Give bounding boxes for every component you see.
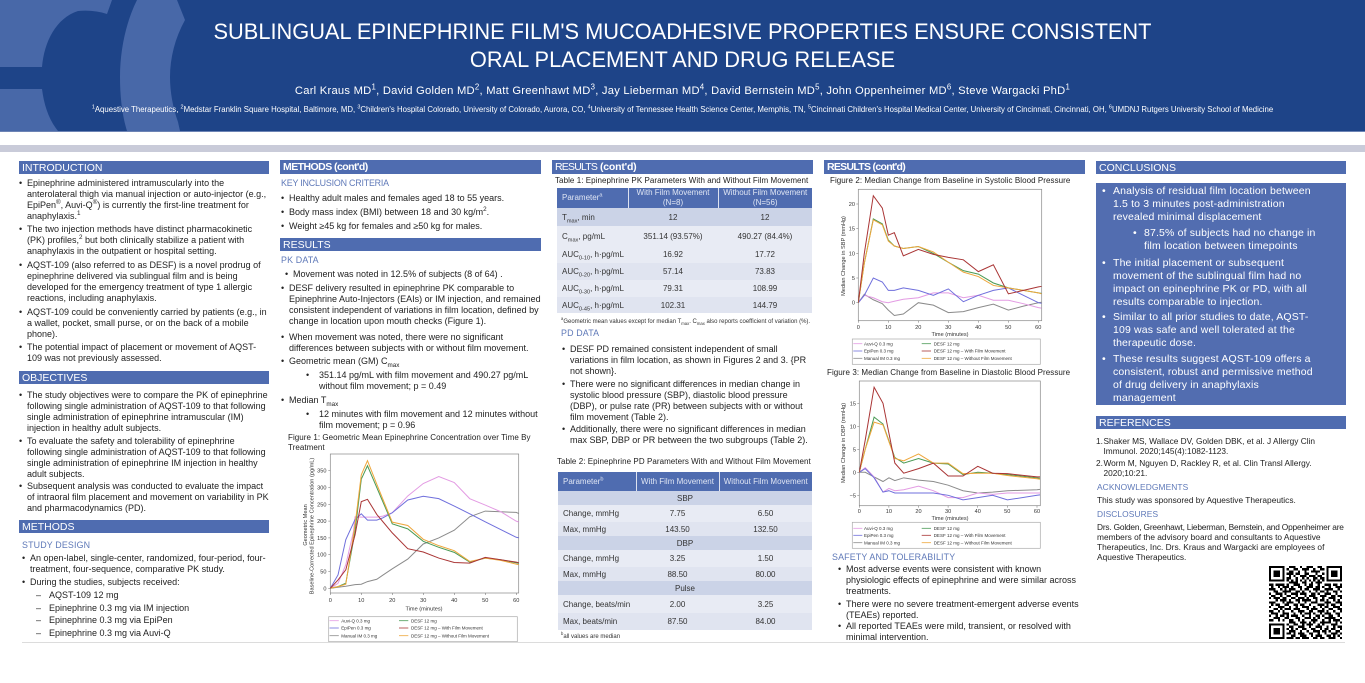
study design text: An open-label, single-center, randomized, four-period, four- [30,553,266,563]
figure 2: systolic blood pressure line chart: Time (minutes) [931,332,969,338]
table 2: PD parameters: Max, mmHg [563,570,606,578]
references list: 2. [1096,458,1103,468]
table 1: PK parameters: 108.99 [753,284,777,293]
table 1: PK parameters: 17.72 [755,250,775,259]
references list: Shaker MS, Wallace DV, Golden DBK, et al. J Allergy Clin [1104,436,1315,446]
conclusions box: These results suggest AQST-109 offers a [1113,353,1311,365]
figure 3: diastolic blood pressure line chart: DESF 12 mg – Without Film Movement [934,540,1012,545]
heading: methods continued: METHODS (cont'd) [283,161,368,173]
heading: conclusions: CONCLUSIONS [1099,162,1176,174]
objectives text: following single administration of AQST-109 to that following [27,447,266,457]
figure 3: diastolic blood pressure line chart: DESF 12 mg – With Film Movement [934,533,1006,538]
PK data text: differences between subjects with or without film movement. [289,343,528,353]
figure 2: systolic blood pressure line chart: 0 [852,301,855,307]
acknowledgments text: This study was sponsored by Aquestive Therapeutics. [1097,495,1296,505]
heading: objectives: OBJECTIVES [22,372,87,384]
conclusions box: 1.5 to 3 minutes post-administration [1113,198,1285,210]
PD data text: DESF PD remained consistent independent of small [570,344,778,354]
column 1: introduction, objectives, methods [19,161,269,638]
table 1: PK parameters: 57.14 [663,267,683,276]
conclusions box: • [1102,185,1106,197]
conclusions box: therapeutic dose. [1113,337,1196,349]
table 2: PD parameters: 143.50 [665,524,690,534]
disclosures text: Therapeutics, Inc. Drs. Kraus and Wargacki are employees of [1097,542,1324,552]
study design text: Epinephrine 0.3 mg via IM injection [49,603,189,613]
figure 1: geometric mean concentration line chart: 0 [329,598,332,604]
figure 1: geometric mean concentration line chart: 50 [482,598,488,604]
figure 3: diastolic blood pressure line chart: 0 [853,470,856,476]
introduction text: (PK) profiles,2 but both clinically stabilize a patient with [27,234,244,245]
introduction text: anaphylaxis.1 [27,210,81,221]
figure 2: systolic blood pressure line chart: EpiPen 0.3 mg [864,349,894,354]
introduction text: phone). [27,329,58,339]
table 1: PK parameters: Without Film Movement [723,188,807,197]
heading: results: RESULTS [283,239,331,251]
safety text: treatments. [846,586,891,596]
table 2: PD parameters: Change, beats/min [563,600,630,608]
figure 3: diastolic blood pressure line chart: Median Change in DBP (mmHg) [841,403,847,483]
PK data text: DESF delivery resulted in epinephrine PK comparable to [289,283,514,293]
conclusions box [1096,183,1346,405]
conclusions box: • [1102,257,1106,269]
PK data text: Epinephrine Auto-Injectors (EAIs) or IM injection, and remained [289,294,541,304]
figure 2: systolic blood pressure line chart: 20 [915,325,921,331]
figure 1: geometric mean concentration line chart: EpiPen 0.3 mg [341,626,371,631]
figure 3: diastolic blood pressure line chart: −5 [850,493,856,499]
objectives text: The study objectives were to compare the PK of epinephrine [27,390,268,400]
figure 3: diastolic blood pressure line chart: 15 [850,401,856,407]
heading: methods: METHODS [22,521,74,533]
figure 2: systolic blood pressure line chart: 15 [849,227,855,233]
references list: 2020;10:21. [1104,468,1147,478]
conclusions box: of drug delivery in anaphylaxis [1113,379,1259,391]
figure 2: systolic blood pressure line chart: 50 [1005,325,1011,331]
safety text: (TEAEs) reported. [846,610,919,620]
table 1: PK parameters: 12 [761,212,769,222]
figure 2: systolic blood pressure line chart: DESF 12 mg [934,341,960,346]
table 2: PD parameters: 1.50 [758,554,773,563]
conclusions box: 109 was safe and well tolerated at the [1113,324,1295,336]
introduction text: EpiPen®, Auvi-Q®) is currently the first-line treatment for [27,199,249,210]
safety text: Most adverse events were consistent with known [846,564,1041,574]
introduction text [19,178,267,363]
PD data text: not shown}. [570,366,617,376]
study design text: treatment, four-sequence, comparative PK study. [30,564,225,574]
study design text: Epinephrine 0.3 mg via EpiPen [49,615,173,625]
safety text: physiologic effects of epinephrine and were similar across [846,575,1076,585]
table 1: PK parameters: 73.83 [755,267,775,276]
heading: introduction: INTRODUCTION [22,162,102,174]
table 1: PK parameters: Parametera [562,192,602,202]
figure 1: geometric mean concentration line chart: 350 [317,469,326,475]
figure 2: systolic blood pressure line chart: 30 [945,325,951,331]
conclusions box: • [1133,227,1137,239]
conclusions box: film location between timepoints [1144,240,1298,252]
subheading: key inclusion criteria: KEY INCLUSION CRITERIA [281,178,389,188]
introduction text: anterolateral thigh via manual injection or auto-injector (e.g., [27,189,266,199]
table 1: PK parameters: AUC0-20, h·pg/mL [562,267,624,279]
figure 3: diastolic blood pressure line chart: Time (minutes) [931,516,969,522]
figure 1 caption [288,433,531,452]
table 1: PK parameters: 12 [669,212,677,222]
PK data text: Geometric mean (GM) Cmax [289,356,399,369]
figure 3: diastolic blood pressure line chart: 40 [975,509,981,515]
PD data text: systolic blood pressure (SBP), diastolic blood pressure [570,390,788,400]
column 2: methods continued, results, figure 1 [280,160,541,642]
conclusions box: consistent, robust and permissive method [1113,366,1313,378]
figure 2: systolic blood pressure line chart: 5 [852,276,855,282]
heading: methods [19,520,269,533]
figure 3: diastolic blood pressure line chart [841,380,1041,549]
table 2: PD parameters: With Film Movement [641,476,714,486]
PK data text: without film movement; p = 0.49 [319,381,446,391]
PK data text: film movement; p = 0.96 [319,420,415,430]
table 1: PK parameters: AUC0-30, h·pg/mL [562,284,624,296]
table 2: PD parameters: DBP [677,538,693,548]
figure 3: diastolic blood pressure line chart: 20 [915,509,922,515]
objectives text: of intraoral film placement and movement on variability in PK [27,492,269,502]
table 1: PK parameters: (N=8) [663,198,683,207]
heading: results continued [824,160,1085,174]
objectives text: To evaluate the safety and tolerability of epinephrine [27,436,235,446]
figure 3: diastolic blood pressure line chart: 10 [850,424,856,430]
PK data text: 12 minutes with film movement and 12 minutes without [319,409,538,419]
table 2: PD parameters [558,472,812,630]
figure 2: systolic blood pressure line chart: DESF 12 mg – Without Film Movement [934,356,1012,361]
heading: objectives [19,371,269,384]
figure 1: geometric mean concentration line chart: DESF 12 mg [411,618,437,623]
icon: QR code [1269,566,1342,639]
PK data text: consistent independent of variations in film location, defined by [289,305,539,315]
figure 2: systolic blood pressure line chart: Manual IM 0.3 mg [864,356,901,361]
subheading: study design: STUDY DESIGN [22,540,90,550]
objectives text: Subsequent analysis was conducted to evaluate the impact [27,481,263,491]
column 5: conclusions, references, disclosures [1096,161,1346,639]
heading: results [280,238,541,251]
heading: references: REFERENCES [1099,417,1171,429]
table 2: PD parameters: 80.00 [755,570,776,578]
introduction text: epinephrine delivered via sublingual film and is being [27,271,238,281]
references list: 1. [1096,436,1103,446]
table 2 footnote: b all values are median [561,631,620,640]
introduction text: The potential impact of placement or movement of AQST- [27,342,256,352]
objectives text: adult subjects. [27,469,85,479]
table 2 caption: Table 2: Epinephrine PD Parameters With and Without Film Movement [557,457,811,466]
conclusions box: movement of the sublingual film had no [1113,270,1301,282]
conclusions box: • [1102,353,1106,365]
figure 3: diastolic blood pressure line chart: 60 [1034,509,1040,515]
table 1: PK parameters: AUC0-45, h·pg/mL [562,300,624,312]
table 1 footnote: a Geometric mean values except for median Tmax. Cmax also reports coefficient of variation (%). [561,316,810,326]
heading: methods continued [280,160,541,174]
table 1: PK parameters [557,188,812,313]
figure 1: geometric mean concentration line chart: 100 [317,553,326,559]
PK data text: change in location upon mouth checks (Figure 1). [289,316,486,326]
safety text: minimal intervention. [846,632,929,642]
figure 2: systolic blood pressure line chart: 60 [1035,325,1041,331]
table 1: PK parameters: 144.79 [753,300,777,310]
introduction text: AQST-109 (also referred to as DESF) is a novel prodrug of [27,260,261,270]
heading: results continued [552,160,813,174]
header decorative logo shape [0,0,185,131]
figure 2: systolic blood pressure line chart [841,188,1042,365]
figure 3: diastolic blood pressure line chart: Auvi-Q 0.3 mg [864,526,893,531]
conclusions box: • [1102,311,1106,323]
figure 1: geometric mean concentration line chart: 250 [317,502,326,508]
table 1: PK parameters: 351.14 (93.57%) [643,232,703,240]
references list: Immunol. 2020;145(4):1082-1123. [1104,446,1228,456]
objectives text: and pharmacodynamics (PD). [27,503,146,513]
inclusion criteria list: Body mass index (BMI) between 18 and 30 kg/m2. [289,206,489,217]
figure 2: systolic blood pressure line chart: 10 [849,251,855,257]
conclusions box: revealed minimal displacement [1113,211,1262,223]
PD data text: max SBP, DBP or PR between the two subgroups (Table 2). [570,435,808,445]
table 1: PK parameters: 490.27 (84.4%) [738,232,792,240]
PD data text: film movement (Table 2). [570,412,669,422]
heading: conclusions [1096,161,1346,174]
objectives text: single administration of epinephrine IM injection in healthy [27,458,258,468]
figure 2: systolic blood pressure line chart: Median Change in SBP (mmHg) [841,216,847,296]
objectives text: injection in healthy adult subjects. [27,423,161,433]
objectives text: following single administration of AQST-109 to that following [27,401,266,411]
inclusion criteria list: Weight ≥45 kg for females and ≥50 kg for males. [289,221,482,231]
figure 2: systolic blood pressure line chart: 40 [975,325,981,331]
figure 1: geometric mean concentration line chart: 50 [320,570,326,576]
affiliations: 1Aquestive Therapeutics, 2Medstar Franklin Square Hospital, Baltimore, MD, 3Children's Hospital Colorado, University of Colorado, Aurora, CO, 4University of Tennessee Health Science Center, Memphis, TN, 5Cincinnati Children's Hospital Medical Center, University of Cincinnati, Cincinnati, OH, 6UMDNJ Rutgers University School of Medicine [92,104,1273,114]
figure 1: geometric mean concentration line chart: 200 [317,519,326,525]
figure 1: geometric mean concentration line chart: 60 [513,598,519,604]
figure 1: geometric mean concentration line chart: DESF 12 mg – Without Film Movement [411,633,490,638]
table 2: PD parameters: SBP [677,494,693,502]
study design text: Epinephrine 0.3 mg via Auvi-Q [49,628,171,638]
subheading: acknowledgments: ACKNOWLEDGMENTS [1097,482,1188,492]
table 1 caption: Table 1: Epinephrine PK Parameters With and Without Film Movement [555,176,808,185]
table 2: PD parameters: Without Film Movement [724,476,808,486]
introduction text: AQST-109 could be conveniently carried by patients (e.g., in [27,307,267,317]
safety text [838,564,1079,642]
table 2: PD parameters: Max, beats/min [563,617,617,626]
introduction text: The two injection methods have distinct pharmacokinetic [27,224,252,234]
PD data text: variations in film location, as shown in Figures 2 and 3. {PR [570,355,806,365]
figure 1 caption: Treatment [288,443,325,452]
table 2: PD parameters: Pulse [675,584,695,592]
subheading: safety and tolerability: SAFETY AND TOLERABILITY [832,552,955,562]
figure 2 caption: Figure 2: Median Change from Baseline in Systolic Blood Pressure [830,176,1070,185]
table 1: PK parameters: AUC0-10, h·pg/mL [562,250,624,262]
figure 3 caption: Figure 3: Median Change from Baseline in Diastolic Blood Pressure [827,368,1070,377]
heading: references [1096,416,1346,429]
authors: Carl Kraus MD1, David Golden MD2, Matt Greenhawt MD3, Jay Lieberman MD4, David Bernstein MD5, John Oppenheimer MD6, Steve Wargacki PhD1 [295,82,1070,97]
figure 3: diastolic blood pressure line chart: EpiPen 0.3 mg [864,533,894,538]
conclusions box: impact on epinephrine PK or PD, with all [1113,283,1307,295]
table 2: PD parameters: 132.50 [753,524,778,534]
table 1: PK parameters: Cmax, pg/mL [562,232,605,243]
table 2: PD parameters: 7.75 [670,509,685,518]
figure 1: geometric mean concentration line chart: 300 [317,486,326,492]
figure 1: geometric mean concentration line chart: Baseline-Corrected Epinephrine Concentration (pg/mL) [310,458,316,594]
title [214,19,1151,72]
references list: Worm M, Nguyen D, Rackley R, et al. Clin Transl Allergy. [1104,458,1312,468]
heading: introduction [19,161,269,174]
figure 1: geometric mean concentration line chart: 150 [317,536,326,542]
table 1: PK parameters: 79.31 [663,284,683,293]
figure 1: geometric mean concentration line chart: 30 [420,598,426,604]
table 2: PD parameters: 3.25 [670,554,685,563]
conclusions box: 87.5% of subjects had no change in [1144,227,1315,239]
introduction text: 109 was not previously assessed. [27,353,162,363]
conclusions box: management [1113,392,1176,404]
figure 2: systolic blood pressure line chart: 0 [857,325,860,331]
introduction text: anaphylaxis in the outpatient or hospital setting. [27,246,217,256]
introduction text: Epinephrine administered intramuscularly into the [27,178,224,188]
conclusions box: results comparable to injection. [1113,296,1263,308]
subheading: PK data: PK DATA [281,255,319,265]
column 4: results figures and safety [824,160,1085,642]
PD data text [562,344,808,445]
figure 3: diastolic blood pressure line chart: 50 [1004,509,1010,515]
table 2: PD parameters: 88.50 [667,570,688,578]
inclusion criteria list: Healthy adult males and females aged 18 to 55 years. [289,193,504,203]
figure 1: geometric mean concentration line chart: DESF 12 mg – With Film Movement [411,626,484,631]
references list [1096,436,1315,478]
conclusions box: The initial placement or subsequent [1113,257,1284,269]
heading: results continued: RESULTS (cont'd) [827,161,905,173]
table 2: PD parameters: Change, mmHg [563,554,619,563]
table 1: PK parameters: Tmax, min [562,212,595,224]
PK data text: Movement was noted in 12.5% of subjects (8 of 64) . [293,269,503,279]
table 1: PK parameters: With Film Movement [637,188,709,197]
disclosures text: members of the advisory board and consultants to Aquestive [1097,532,1321,542]
study design text [22,553,266,638]
figure 1: geometric mean concentration line chart [303,454,520,642]
table 1: PK parameters: 16.92 [663,250,683,259]
figure 1: geometric mean concentration line chart: Auvi-Q 0.3 mg [341,618,371,623]
safety text: All reported TEAEs were mild, transient, or resolved with [846,621,1071,631]
figure 1 caption: Figure 1: Geometric Mean Epinephrine Concentration over Time By [288,433,531,442]
header banner [0,0,1365,132]
table 2: PD parameters: 87.50 [667,617,688,626]
safety text: There were no severe treatment-emergent adverse events [846,599,1079,609]
study design text: During the studies, subjects received: [30,577,180,587]
table 2: PD parameters: Change, mmHg [563,509,619,518]
figure 3: diastolic blood pressure line chart: DESF 12 mg [934,526,960,531]
heading: results continued: RESULTS (cont'd) [555,161,636,173]
PK data text: 351.14 pg/mL with film movement and 490.27 pg/mL [319,370,528,380]
conclusions box: Similar to all prior studies to date, AQST- [1113,311,1309,323]
conclusions box: Analysis of residual film location between [1113,185,1311,197]
study design text: AQST-109 12 mg [49,590,119,600]
disclosures text: Drs. Golden, Greenhawt, Lieberman, Bernstein, and Oppenheimer are [1097,522,1344,532]
figure 3: diastolic blood pressure line chart: Manual IM 0.3 mg [864,540,901,545]
figure 3: diastolic blood pressure line chart: 30 [945,509,951,515]
figure 2: systolic blood pressure line chart: 10 [885,325,891,331]
table 2: PD parameters: Max, mmHg [563,524,606,534]
table 1: PK parameters: 102.31 [661,300,685,310]
figure 1: geometric mean concentration line chart: 40 [451,598,457,604]
title: ORAL PLACEMENT AND DRUG RELEASE [470,47,895,72]
inclusion criteria list [281,193,504,231]
disclosures text: Aquestive Therapeutics. [1097,552,1186,562]
PD data text: (DBP), or pulse rate (PR) between subjects with or without [570,401,803,411]
figure 3: diastolic blood pressure line chart: 5 [853,447,856,453]
figure 1: geometric mean concentration line chart: 0 [323,586,326,592]
figure 2: systolic blood pressure line chart: 20 [849,202,855,208]
PK data text: When movement was noted, there were no significant [289,332,503,342]
table 2: PD parameters: 3.25 [758,600,773,608]
column 3: results continued, tables, PD data [552,160,813,640]
table 2: PD parameters: Parameterb [563,476,603,486]
subheading: disclosures: DISCLOSURES [1097,509,1158,519]
PK data text: Median Tmax [289,395,338,408]
introduction text: a wallet, pocket, small purse, or on the back of a mobile [27,318,249,328]
figure 2: systolic blood pressure line chart: DESF 12 mg – With Film Movement [934,349,1006,354]
objectives text: single administration of epinephrine intramuscular (IM) [27,412,244,422]
figure 1: geometric mean concentration line chart: Time (minutes) [405,606,443,612]
PD data text: There were no significant differences in median change in [570,379,800,389]
figure 1: geometric mean concentration line chart: Geometric Mean [303,504,309,546]
figure 3: diastolic blood pressure line chart: 0 [858,509,861,515]
objectives text [19,390,269,513]
table 2: PD parameters: 6.50 [758,509,773,518]
figure 2: systolic blood pressure line chart: Auvi-Q 0.3 mg [864,341,893,346]
introduction text: reactions, including anaphylaxis. [27,293,157,303]
table 2: PD parameters: 84.00 [755,617,776,626]
PK data text [281,269,541,430]
figure 1: geometric mean concentration line chart: Manual IM 0.3 mg [341,633,378,638]
table 1: PK parameters: (N=56) [753,198,778,207]
introduction text: developed for the emergency treatment of type 1 allergic [27,282,252,292]
title: SUBLINGUAL EPINEPHRINE FILM'S MUCOADHESIVE PROPERTIES ENSURE CONSISTENT [214,19,1151,44]
figure 3: diastolic blood pressure line chart: 10 [886,509,892,515]
figure 1: geometric mean concentration line chart: 20 [389,598,395,604]
disclosures text [1097,522,1344,562]
figure 1: geometric mean concentration line chart: 10 [358,598,364,604]
subheading: PD data: PD DATA [561,328,599,338]
PD data text: Additionally, there were no significant differences in median [570,424,806,434]
table 2: PD parameters: 2.00 [670,600,685,608]
